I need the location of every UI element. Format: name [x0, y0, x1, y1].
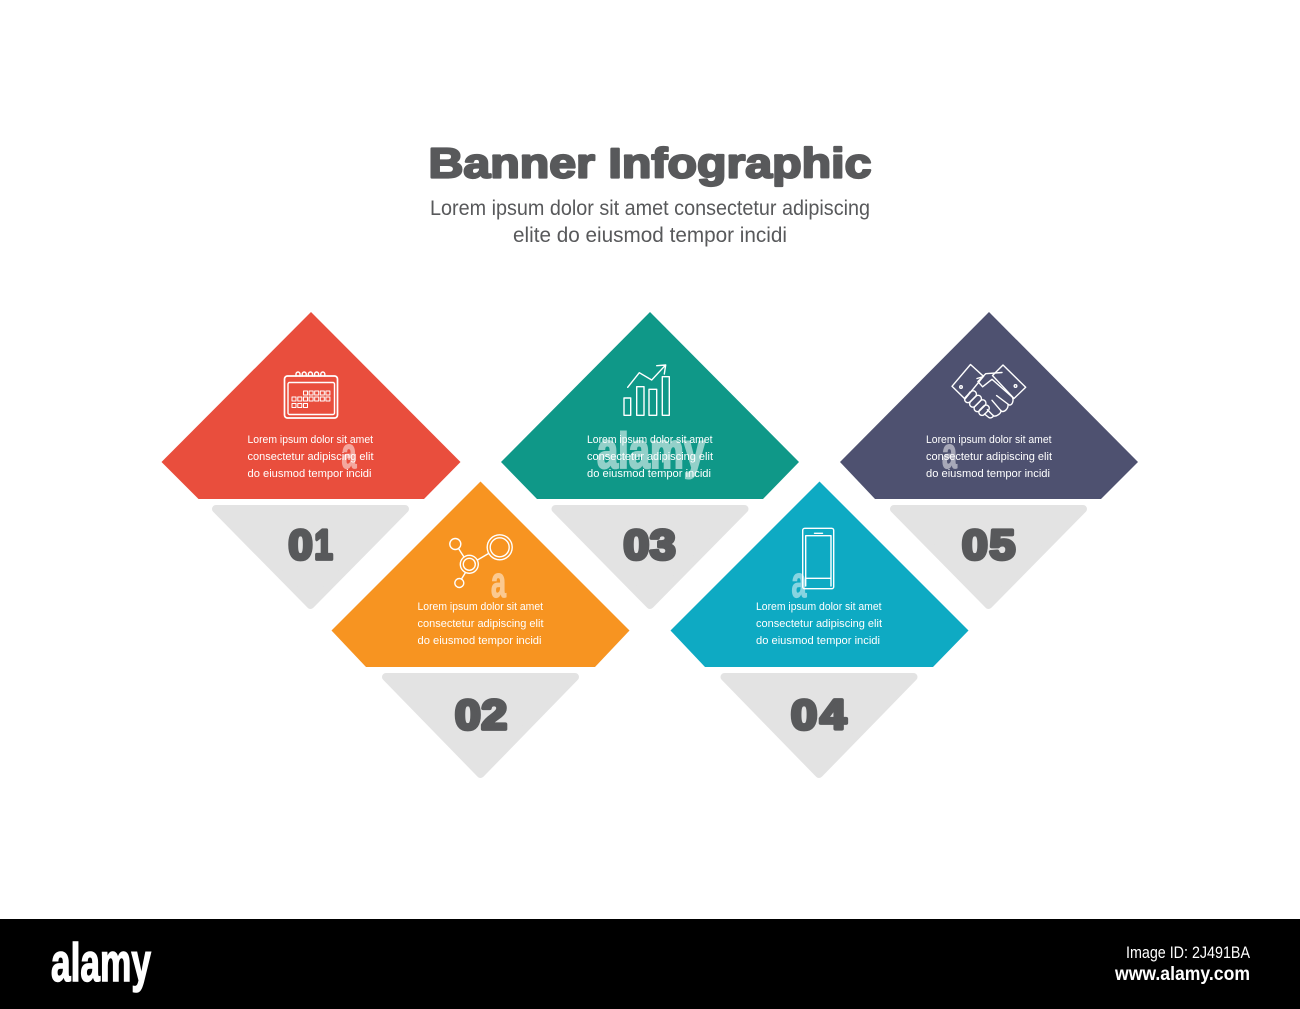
- number 05: 05: [962, 522, 1015, 569]
- description text: consectetur adipiscing elit: [756, 618, 883, 630]
- description text: [248, 434, 374, 480]
- title: Banner Infographic: [428, 140, 872, 186]
- description text: do eiusmod tempor incidi: [248, 468, 372, 480]
- description text: consectetur adipiscing elit: [587, 451, 714, 463]
- panel: step 05: [840, 312, 1138, 605]
- number 03: 03: [624, 522, 676, 569]
- description text: do eiusmod tempor incidi: [418, 635, 542, 647]
- green banner shape: [501, 312, 799, 499]
- teal banner shape: [670, 482, 968, 667]
- description text: consectetur adipiscing elit: [248, 451, 374, 463]
- watermark letter: a: [942, 429, 957, 478]
- subtitle: Lorem ipsum dolor sit amet consectetur adipiscing: [430, 196, 870, 220]
- description text: do eiusmod tempor incidi: [756, 635, 880, 647]
- number 02: 02: [455, 692, 507, 739]
- watermark letter: a: [792, 558, 807, 607]
- grey number tab: [724, 677, 914, 774]
- description text: consectetur adipiscing elit: [418, 618, 544, 630]
- description text: [418, 601, 544, 647]
- watermark letter: a: [491, 558, 506, 607]
- icon: growth chart: [624, 365, 669, 415]
- description text: [587, 434, 714, 480]
- icon: calendar: [284, 372, 338, 418]
- watermark logo: alamy: [597, 423, 705, 479]
- grey number tab: [216, 509, 405, 605]
- description text: do eiusmod tempor incidi: [926, 468, 1050, 480]
- number 04: 04: [791, 692, 846, 738]
- icon: smartphone: [803, 528, 834, 589]
- description text: [756, 601, 883, 647]
- description text: Lorem ipsum dolor sit amet: [248, 434, 374, 446]
- description text: consectetur adipiscing elit: [926, 451, 1053, 463]
- grey number tab: [894, 509, 1083, 605]
- red banner shape: [162, 312, 460, 499]
- watermark letter: a: [342, 429, 357, 478]
- description text: Lorem ipsum dolor sit amet: [926, 434, 1052, 446]
- grey number tab: [386, 677, 575, 774]
- description text: Lorem ipsum dolor sit amet: [587, 434, 713, 446]
- subtitle: [430, 196, 870, 247]
- icon: molecule network: [450, 535, 512, 588]
- footer logo: alamy: [51, 933, 151, 993]
- description text: Lorem ipsum dolor sit amet: [418, 601, 544, 613]
- panel: step 04: [670, 482, 968, 774]
- number 01: 1: [314, 521, 333, 568]
- panel: step 02: [332, 482, 630, 774]
- description text: do eiusmod tempor incidi: [587, 468, 711, 480]
- number 01: [288, 521, 333, 569]
- description text: [926, 434, 1053, 480]
- navy banner shape: [840, 312, 1138, 499]
- subtitle: elite do eiusmod tempor incidi: [513, 223, 787, 247]
- icon: handshake: [952, 364, 1026, 418]
- panel: step 01: [162, 312, 460, 605]
- image id: Image ID: 2J491BA: [1126, 943, 1251, 962]
- footer bar: [0, 919, 1300, 1009]
- website: www.alamy.com: [1114, 964, 1250, 985]
- description text: Lorem ipsum dolor sit amet: [756, 601, 882, 613]
- number 01: 0: [288, 522, 313, 569]
- grey number tab: [556, 509, 744, 605]
- orange banner shape: [332, 482, 630, 667]
- panel: step 03: [501, 312, 799, 605]
